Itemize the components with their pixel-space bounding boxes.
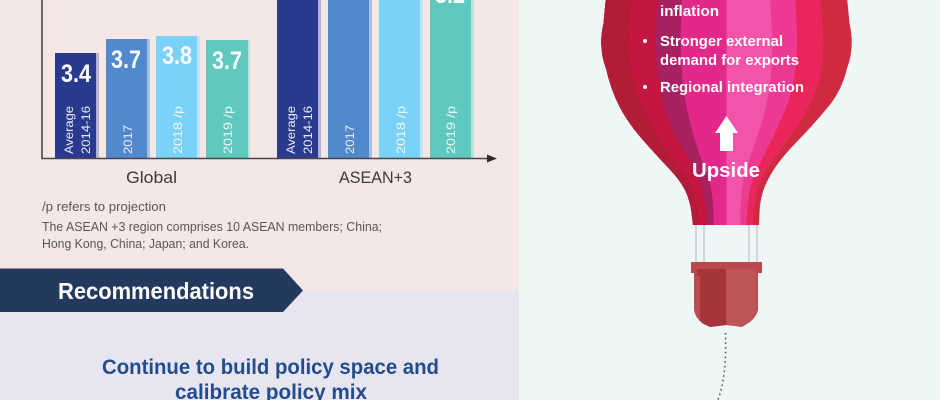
axis label: Global: Global: [126, 168, 177, 187]
bar chart: [42, 0, 497, 187]
recommendations banner: [0, 268, 303, 312]
chart notes: /p refers to projection: [42, 199, 166, 214]
recommendation heading: [102, 356, 439, 400]
balloon text: upside factors: Regional integration: [660, 80, 804, 96]
balloon text: upside factors: [643, 4, 804, 96]
bar: Global average 2014-16: Average: [62, 106, 76, 154]
bar: ASEAN+3 average 2014-16: 2014-16: [301, 106, 315, 154]
bar: Global 2017: 2017: [121, 125, 135, 154]
bar: Global 2018 projection: [156, 36, 200, 158]
panel: right background: [519, 0, 940, 400]
basket: [691, 262, 762, 327]
recommendations banner: Recommendations: [58, 278, 254, 304]
bar: Global 2017: 3.7: [111, 46, 141, 74]
bar: ASEAN+3 2018 projection: 2018 /p: [394, 106, 408, 154]
bar: ASEAN+3 average 2014-16: [277, 0, 321, 158]
bar: Global average 2014-16: 2014-16: [79, 106, 93, 154]
bar: Global 2017: [106, 39, 150, 158]
chart notes: [42, 199, 382, 251]
bar: Global 2019 projection: 3.7: [212, 47, 242, 75]
recommendation heading: Continue to build policy space and: [102, 356, 439, 379]
balloon text: upside factors: demand for exports: [660, 53, 799, 69]
bar: ASEAN+3 2019 projection: 2019 /p: [444, 106, 458, 154]
bar: Global 2019 projection: [206, 40, 250, 158]
bar: ASEAN+3 2017: [328, 0, 372, 158]
chart notes: The ASEAN +3 region comprises 10 ASEAN members; China;: [42, 219, 382, 234]
chart axes: [42, 0, 497, 162]
bar: Global 2018 projection: 3.8: [162, 42, 192, 70]
balloon text: upside factors: inflation: [660, 4, 719, 20]
bar: ASEAN+3 2019 projection: [430, 0, 474, 158]
panel: chart background: [0, 0, 519, 290]
bar: Global average 2014-16: 3.4: [61, 60, 91, 88]
balloon ropes: [696, 225, 757, 263]
label: Upside: Upside: [692, 160, 760, 182]
bar: ASEAN+3 2017: 2017: [343, 125, 357, 154]
bar: ASEAN+3 average 2014-16: Average: [284, 106, 298, 154]
bar: Global 2018 projection: 2018 /p: [171, 106, 185, 154]
balloon text: upside factors: Stronger external: [660, 34, 783, 50]
panel: recommendations background: [0, 290, 519, 400]
bar: ASEAN+3 2018 projection: [379, 0, 423, 158]
balloon envelope: [590, 0, 860, 230]
hot air balloon: [590, 0, 860, 400]
axis label: ASEAN+3: ASEAN+3: [339, 168, 412, 187]
icon: up arrow: [715, 116, 738, 151]
chart notes: Hong Kong, China; Japan; and Korea.: [42, 236, 249, 251]
bar: Global average 2014-16: [55, 53, 99, 158]
bar: Global 2019 projection: 2019 /p: [221, 106, 235, 154]
dotted trail: [718, 333, 726, 400]
